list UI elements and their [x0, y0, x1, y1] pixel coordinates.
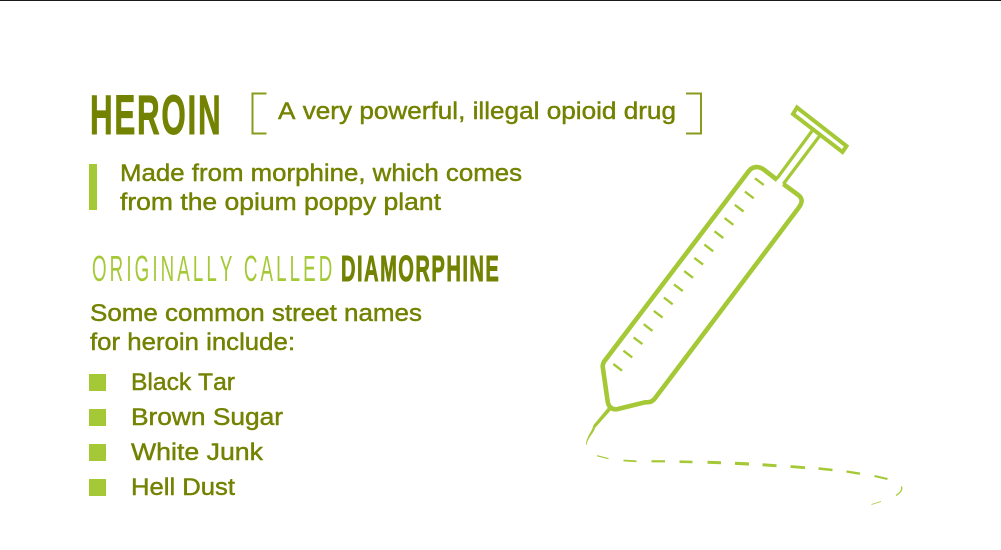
heading: originally called diamorphine: [92, 250, 500, 290]
list item: hell dust: Hell Dust: [131, 474, 235, 501]
right bracket: [686, 94, 701, 134]
syringe measurement ticks: [613, 178, 764, 371]
subtitle: A very powerful, illegal opioid drug: [278, 98, 676, 125]
street names intro: for heroin include:: [90, 329, 295, 356]
top border line: [0, 0, 1001, 1]
list item: white junk: White Junk: [131, 439, 264, 466]
street names intro: [90, 300, 422, 356]
list item: black tar: Black Tar: [131, 369, 235, 396]
list item: brown sugar: Brown Sugar: [131, 404, 283, 431]
origin description: [120, 160, 522, 216]
syringe plunger rod: [777, 131, 821, 184]
syringe barrel: [603, 167, 802, 409]
dashed trail: [597, 456, 902, 504]
list item: white junk: [89, 439, 264, 466]
syringe plunger handle: [793, 108, 846, 152]
accent bar: [89, 164, 97, 210]
left bracket: [252, 94, 266, 134]
heading: originally called diamorphine: ORIGINALLY CALLED: [92, 250, 335, 290]
list item: hell dust: [89, 474, 235, 501]
list item: black tar: [89, 369, 235, 396]
heading: originally called diamorphine: DIAMORPHINE: [341, 250, 500, 290]
title: heroin: HEROIN: [90, 83, 222, 146]
syringe needle: [586, 407, 612, 445]
street names intro: Some common street names: [90, 300, 422, 327]
origin description: from the opium poppy plant: [120, 189, 441, 216]
icon: syringe: [586, 108, 902, 504]
street names list: [89, 369, 283, 501]
origin description: Made from morphine, which comes: [120, 160, 522, 187]
